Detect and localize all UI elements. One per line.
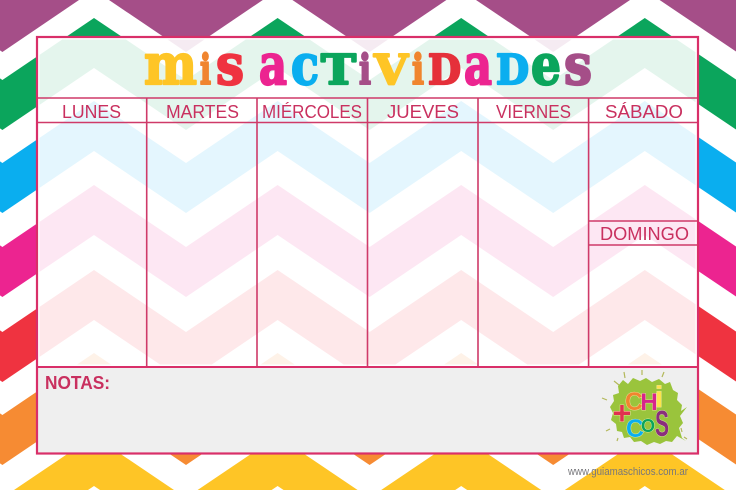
logo text: S [655,403,669,444]
title: a [259,32,287,98]
title: D [428,46,461,94]
day headings: JUEVES [387,102,459,122]
logo text [613,381,669,444]
logo text: i [655,381,663,414]
title: D [496,46,529,94]
logo text: + [613,395,631,431]
day headings: SÁBADO [605,102,683,122]
title: a [464,32,492,98]
day headings: MIÉRCOLES [262,102,362,122]
logo text: O [641,416,655,436]
day headings: VIERNES [496,102,571,122]
title: e [531,32,561,98]
title [144,32,592,98]
title: m [144,32,197,98]
day headings: LUNES [62,102,121,122]
logo droplets [602,370,687,441]
day headings [62,102,689,244]
title: i [359,46,371,94]
title: s [216,32,244,98]
panel: notes area [37,367,698,453]
notes top border [37,366,698,368]
logo splat [610,378,687,445]
title: T [321,46,357,94]
website url: www.guiamaschicos.com.ar [567,466,688,478]
panel outer border [37,37,698,454]
title: c [291,32,319,98]
logo text: H [640,389,658,416]
title: s [564,32,592,98]
logo: Más Chicos [602,370,687,445]
logo text: C [625,388,643,416]
panel: weekly planner [37,37,698,454]
title: i [200,46,211,94]
day headings: MARTES [166,102,239,122]
logo text: C [626,415,644,443]
grid lines [37,98,698,367]
day headings: DOMINGO [600,224,689,244]
notes label: NOTAS: [45,373,110,393]
title: V [373,46,409,94]
title: i [412,46,424,94]
